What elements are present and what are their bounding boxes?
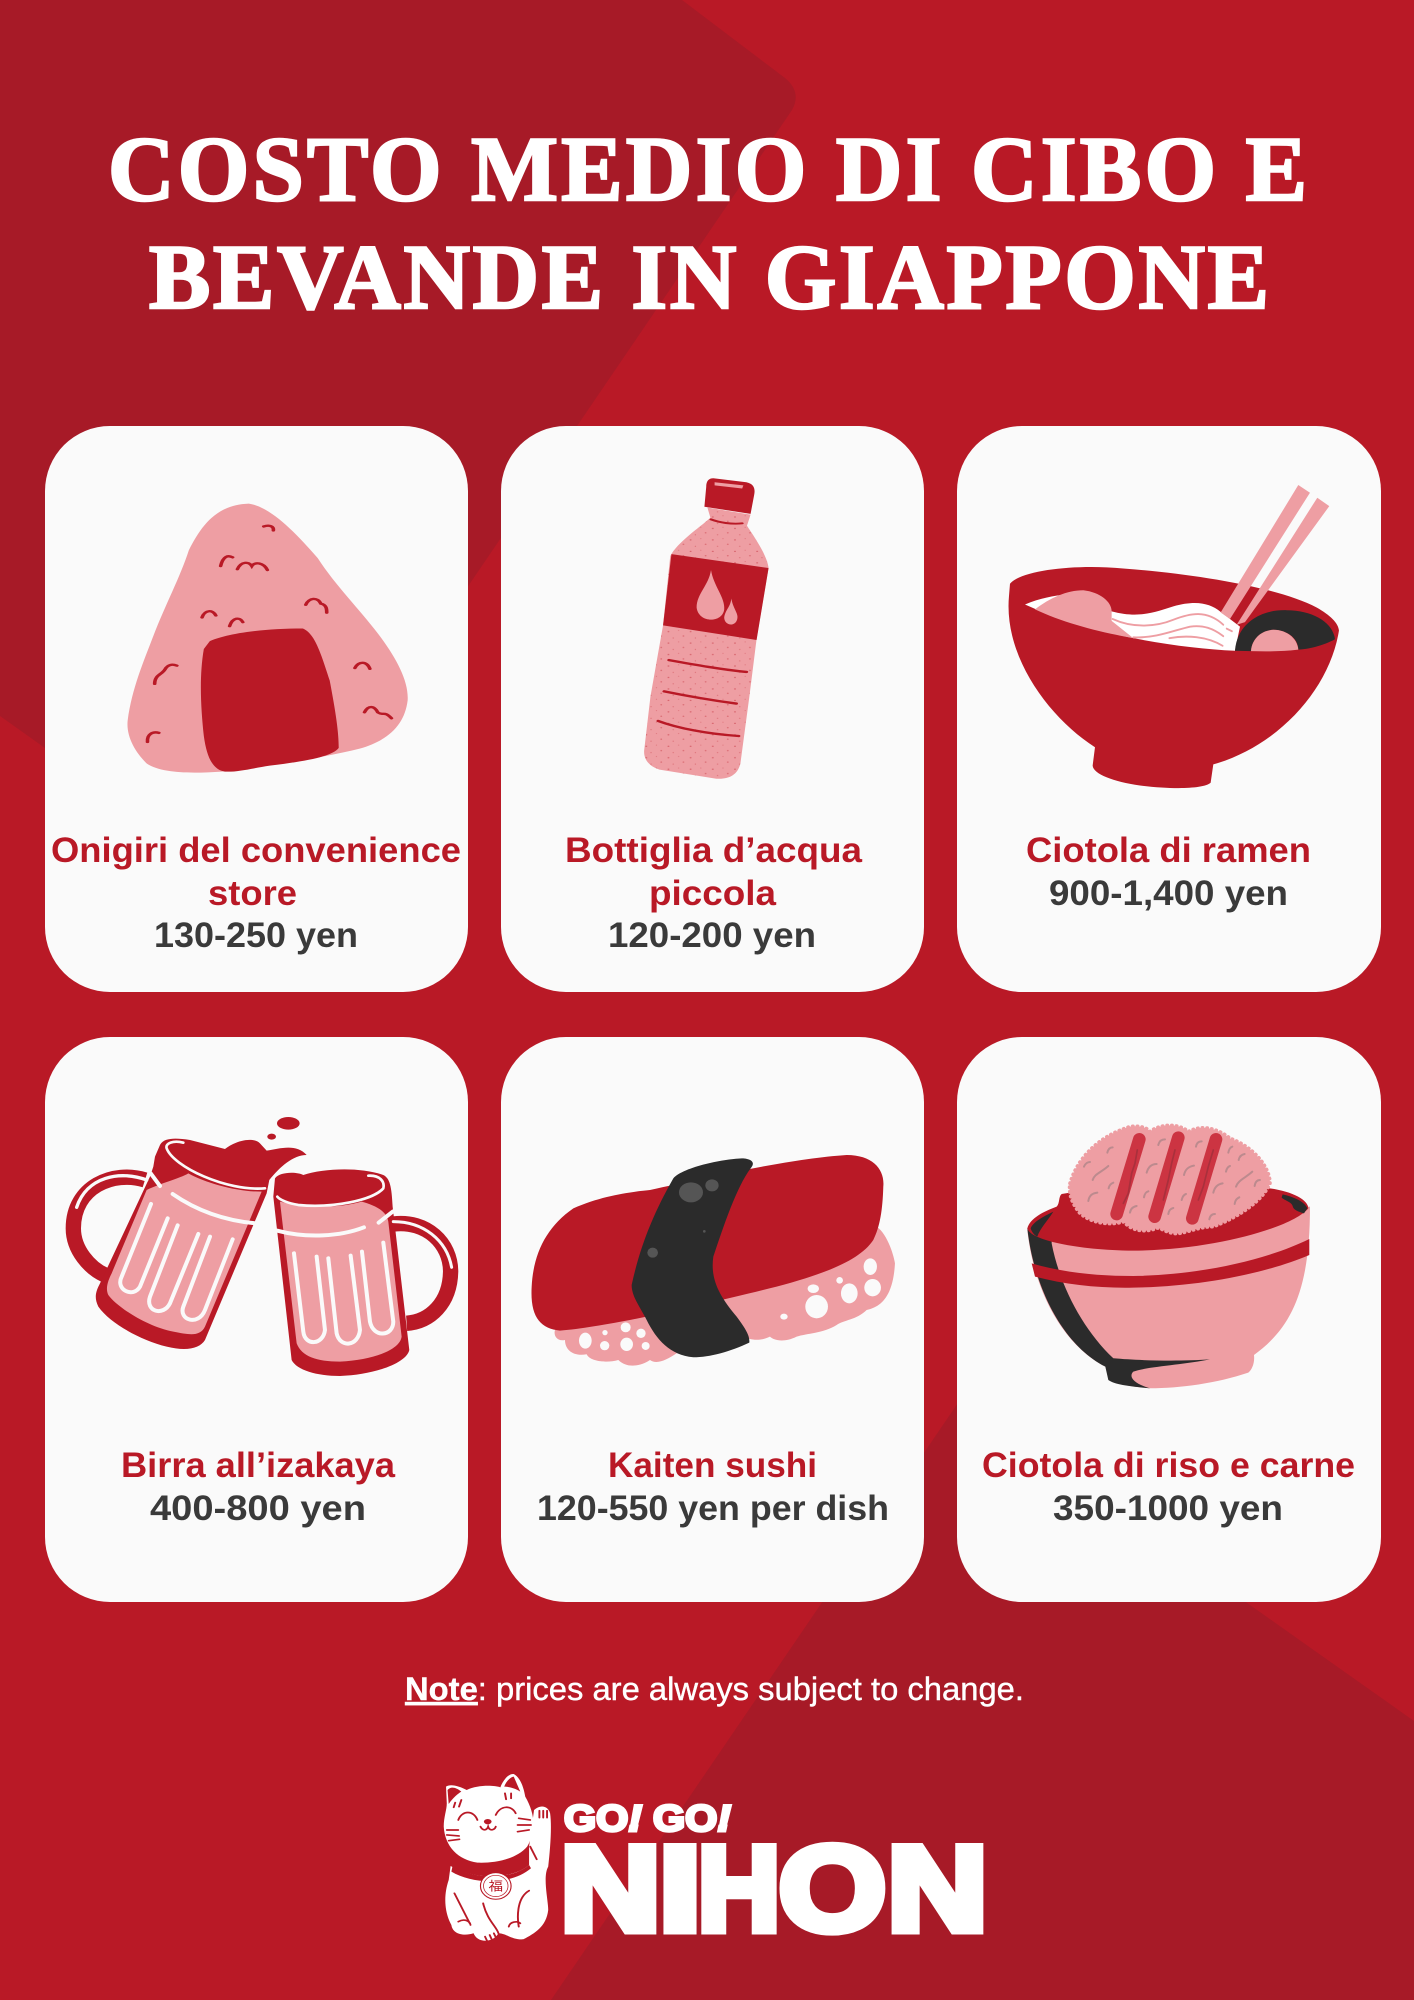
label: onigiri name — [51, 831, 461, 913]
price: bottle: 120-200 yen — [608, 916, 816, 955]
price: rice bowl: 350-1000 yen — [1053, 1489, 1283, 1528]
logo — [444, 1774, 987, 1956]
logo text: nihon — [560, 1822, 988, 1956]
icon: sushi — [531, 1155, 895, 1366]
icon: lucky cat — [444, 1774, 551, 1941]
logo text: go go: GO! — [564, 1798, 642, 1839]
left mug — [73, 1139, 307, 1349]
label: sushi name: Kaiten sushi — [608, 1446, 817, 1485]
label: rice bowl name: Ciotola di riso e carne — [982, 1446, 1355, 1485]
logo text: nihon: N — [888, 1822, 988, 1956]
panel: water bottle — [501, 426, 924, 992]
icon: rice bowl — [1027, 1125, 1310, 1388]
panel: ramen — [957, 426, 1381, 992]
logo text: go go: GO! — [653, 1798, 731, 1839]
label: onigiri name: Onigiri del convenience — [51, 831, 461, 870]
price: sushi: 120-550 yen per dish — [537, 1489, 889, 1528]
panel: kaiten sushi — [501, 1037, 924, 1602]
logo text: go go — [564, 1798, 731, 1839]
logo text: nihon: N — [560, 1822, 660, 1956]
label: onigiri name: store — [208, 874, 297, 913]
icon: ramen bowl — [1009, 485, 1339, 788]
title: COSTO MEDIO DI CIBO E — [108, 118, 1307, 220]
right mug — [273, 1169, 452, 1376]
note: Note: prices are always subject to change. — [405, 1671, 1024, 1707]
icon: lucky cat: 福 — [489, 1876, 503, 1894]
title: BEVANDE IN GIAPPONE — [149, 226, 1269, 328]
price: beer: 400-800 yen — [150, 1489, 366, 1528]
title — [108, 118, 1307, 328]
background shape: top-left dark panel — [0, 0, 796, 898]
panel: onigiri — [45, 426, 468, 992]
icon: onigiri — [127, 504, 408, 773]
price: onigiri: 130-250 yen — [154, 916, 358, 955]
icon: water bottle — [644, 478, 769, 779]
price: ramen: 900-1,400 yen — [1049, 874, 1288, 913]
panel: beer — [45, 1037, 468, 1602]
panel: rice and meat bowl — [957, 1037, 1381, 1602]
label: ramen name: Ciotola di ramen — [1026, 831, 1311, 870]
label: bottle name: piccola — [649, 874, 777, 913]
label: beer name: Birra all’izakaya — [121, 1446, 396, 1485]
logo text: nihon: O — [779, 1822, 886, 1956]
logo text: nihon: H — [698, 1822, 780, 1956]
background shape: bottom-right dark panel — [551, 1400, 1414, 2000]
label: bottle name: Bottiglia d’acqua — [565, 831, 863, 870]
label: bottle name — [565, 831, 863, 913]
logo text: nihon: I — [659, 1822, 701, 1956]
icon: beer mugs — [73, 1117, 452, 1376]
